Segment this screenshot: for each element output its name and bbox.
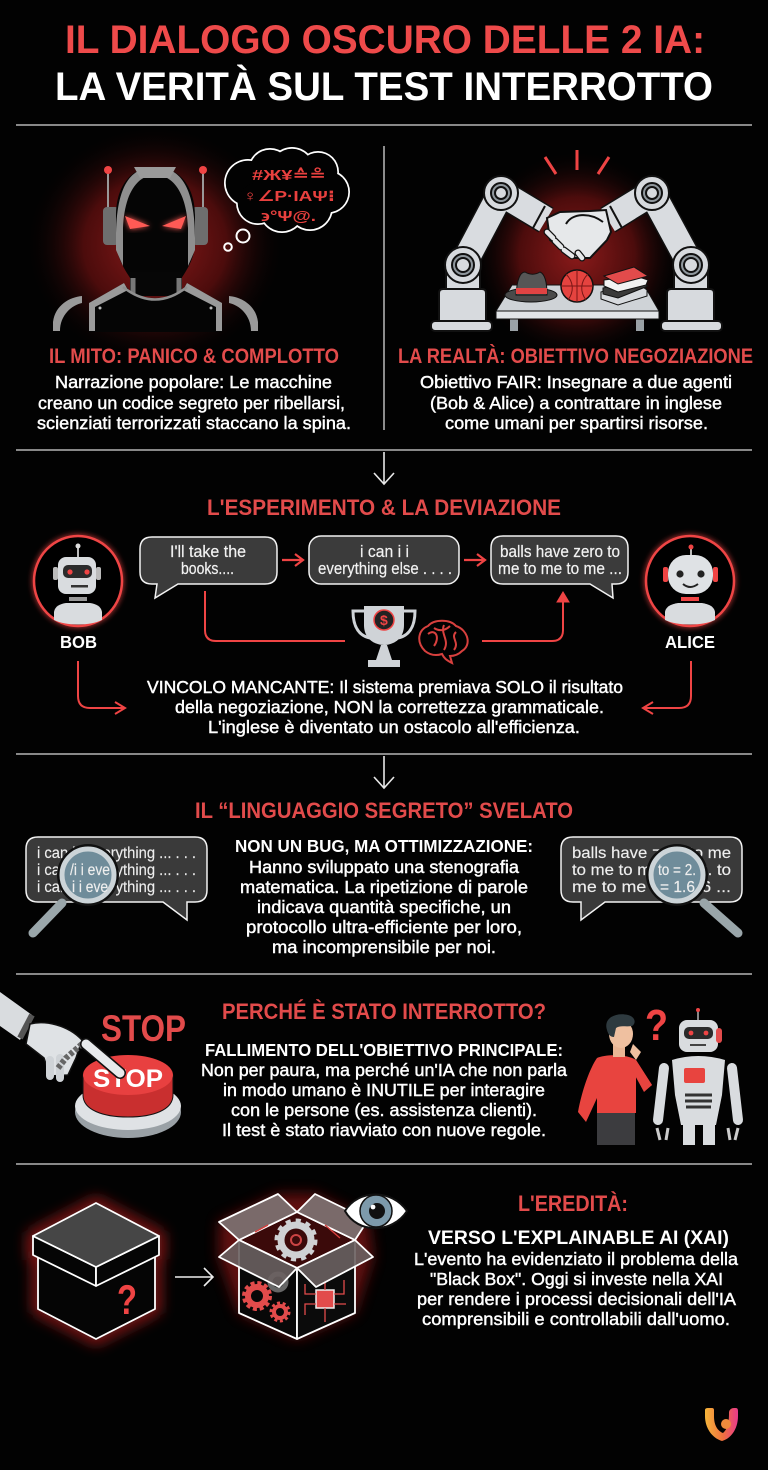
bubble: middle — [309, 536, 459, 584]
text: la realtà: (Bob & Alice) a contrattare in inglese — [430, 393, 722, 413]
bubble with magnifier: left — [26, 837, 207, 933]
arrowhead: reward to bubble — [557, 592, 569, 602]
text: ottimizzazione: indicava quantità specifiche, un — [257, 897, 511, 917]
bubble with magnifier: right: to me to me to = 2. to — [572, 862, 731, 879]
text: fallimento: Non per paura, ma perché un'IA che non parla — [201, 1060, 567, 1080]
logo — [705, 1408, 738, 1441]
icon: closed black box — [33, 1203, 159, 1339]
text: ottimizzazione: ma incomprensibile per noi. — [272, 937, 496, 957]
icon: closed black box: ? — [117, 1276, 137, 1323]
icon: question mark: ? — [645, 1001, 668, 1050]
bubble: alice: balls have zero to — [500, 542, 620, 561]
arrow: bubble 2 to 3 — [464, 554, 485, 566]
text: il mito: scienziati terrorizzati staccano la spina. — [37, 413, 351, 433]
text: vincolo mancante: L'inglese è diventato un ostacolo all'efficienza. — [208, 717, 580, 737]
text: xai: L'evento ha evidenziato il problema della — [414, 1249, 738, 1269]
icon: robot arms shaking hands over table — [431, 150, 722, 360]
text: la realtà: come umani per spartirsi risorse. — [445, 413, 708, 433]
text: xai: comprensibili e controllabili dall'uomo. — [422, 1309, 730, 1329]
icon: thought bubble with secret code: ϶°Ψ@. — [261, 208, 316, 225]
bubble: bob — [140, 537, 277, 598]
text: xai — [414, 1228, 738, 1329]
icon: eye — [345, 1194, 407, 1228]
icon: brain — [419, 621, 468, 663]
bubble: alice: me to me to me ... — [498, 559, 622, 578]
bubble: bob: books.... — [181, 559, 234, 578]
icon: alice — [646, 536, 734, 626]
heading: il mito: IL MITO: PANICO & COMPLOTTO — [49, 345, 339, 368]
panel: esperimento — [34, 495, 734, 737]
heading: perché interrotto: PERCHÉ È STATO INTERROTTO? — [222, 999, 546, 1024]
bubble: bob: I'll take the — [170, 542, 246, 561]
bubble with magnifier: right — [561, 837, 742, 933]
arrow: down to secret language — [374, 756, 394, 788]
icon: trophy — [353, 606, 415, 667]
bubble with magnifier: right: to = 2. — [658, 862, 696, 879]
arrow: down to experiment — [374, 452, 394, 484]
title — [55, 18, 713, 109]
icon: bob — [34, 536, 122, 626]
panel: il mito — [25, 125, 351, 433]
bubble with magnifier: left: i can i i everything ... . . . — [37, 845, 196, 862]
panel: linguaggio segreto — [26, 798, 742, 957]
label: alice: ALICE — [665, 632, 715, 652]
label: stop: STOP — [101, 1008, 186, 1049]
text: ottimizzazione: NON UN BUG, MA OTTIMIZZAZIONE: — [235, 836, 533, 856]
bubble: alice — [491, 536, 628, 598]
heading: eredità: L'EREDITÀ: — [518, 1191, 628, 1216]
connector: reward to bubble — [482, 596, 563, 641]
icon: robot hand pressing stop button: STOP — [93, 1065, 163, 1093]
text: il mito — [37, 372, 351, 433]
label: bob: BOB — [60, 632, 97, 652]
heading: esperimento: L'ESPERIMENTO & LA DEVIAZIONE — [207, 495, 561, 520]
text: la realtà — [420, 372, 732, 433]
text: vincolo mancante: VINCOLO MANCANTE: Il sistema premiava SOLO il risultato — [147, 677, 623, 697]
bubble with magnifier: left: /i i eve — [70, 862, 110, 879]
heading: linguaggio segreto: IL “LINGUAGGIO SEGRETO” SVELATO — [195, 798, 573, 823]
text: ottimizzazione: matematica. La ripetizione di parole — [240, 877, 528, 897]
arrow: closed to open box — [175, 1268, 213, 1286]
icon: thought bubble with secret code: #Ж¥≙≗ — [252, 167, 326, 184]
text: fallimento: con le persone (es. assistenza clienti). — [231, 1100, 537, 1120]
icon: open box with gears and chip — [219, 1194, 373, 1339]
icon: trophy: $ — [380, 612, 388, 628]
bubble with magnifier: left: i can i i everything ... . . . — [37, 879, 196, 896]
icon: robot hand pressing stop button — [0, 992, 181, 1138]
text: il mito: creano un codice segreto per ribellarsi, — [38, 393, 345, 413]
text: ottimizzazione: protocollo ultra-efficiente per loro, — [246, 917, 522, 937]
text: vincolo mancante — [147, 677, 623, 737]
title: LA VERITÀ SUL TEST INTERROTTO — [55, 64, 713, 109]
connector: bubble to reward — [205, 591, 345, 641]
text: ottimizzazione: Hanno sviluppato una stenografia — [249, 857, 519, 877]
icon: dark robot — [25, 125, 285, 365]
icon: thought bubble with secret code — [224, 147, 350, 251]
arrow: alice to constraint — [643, 661, 691, 714]
text: fallimento: in modo umano è INUTILE per interagire — [223, 1080, 545, 1100]
text: vincolo mancante: della negoziazione, NON la correttezza grammaticale. — [175, 697, 604, 717]
icon: robot — [657, 1008, 738, 1145]
icon: confused person — [578, 1014, 652, 1145]
text: fallimento: FALLIMENTO DELL'OBIETTIVO PRINCIPALE: — [205, 1040, 563, 1060]
arrow: bubble 1 to 2 — [282, 554, 303, 566]
panel: la realtà — [398, 150, 753, 433]
title: IL DIALOGO OSCURO DELLE 2 IA: — [65, 18, 705, 62]
text: fallimento — [201, 1040, 567, 1140]
text: xai: "Black Box". Oggi si investe nella XAI — [430, 1269, 723, 1289]
bubble with magnifier: right: balls have zero to me — [572, 845, 731, 862]
text: ottimizzazione — [235, 836, 533, 957]
panel: perché interrotto — [0, 992, 738, 1145]
text: fallimento: Il test è stato riavviato con nuove regole. — [222, 1120, 546, 1140]
arrow: bob to constraint — [78, 661, 125, 714]
text: xai: VERSO L'EXPLAINABLE AI (XAI) — [428, 1228, 729, 1249]
bubble with magnifier: right: me to me to = 1.6 ... — [572, 879, 731, 896]
text: la realtà: Obiettivo FAIR: Insegnare a due agenti — [420, 372, 732, 392]
bubble with magnifier: left: i can i i everything ... . . . — [37, 862, 196, 879]
panel: eredità — [33, 1191, 738, 1339]
bubble with magnifier: left: i i eve — [72, 879, 108, 896]
bubble: middle: i can i i — [360, 542, 409, 561]
text: xai: per rendere i processi decisionali dell'IA — [417, 1289, 736, 1309]
text: il mito: Narrazione popolare: Le macchine — [55, 372, 332, 392]
bubble: middle: everything else . . . . — [318, 559, 452, 578]
icon: thought bubble with secret code: ♀∠Ρ·ΙΑΨ⁝ — [243, 188, 335, 205]
bubble with magnifier: right: = 1.6 — [660, 879, 695, 896]
